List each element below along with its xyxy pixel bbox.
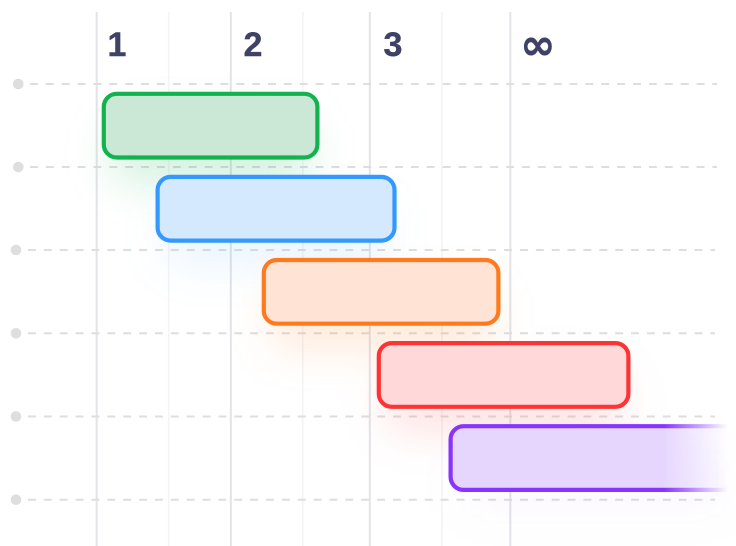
bar: red phase xyxy=(379,343,628,407)
column label: 2: 2 xyxy=(244,26,262,64)
column label: 1: 1 xyxy=(108,26,126,64)
bar: orange phase xyxy=(264,260,498,324)
bar: green phase xyxy=(104,94,317,158)
bar shadow: red xyxy=(387,371,620,431)
bar: purple phase fading out to the right xyxy=(451,426,736,490)
bar shadow: purple xyxy=(459,454,729,514)
bar shadow: green xyxy=(112,122,309,182)
column label: 3: 3 xyxy=(384,26,402,64)
phase bars xyxy=(102,92,726,492)
bar: blue phase xyxy=(158,177,394,241)
bar shadow: blue xyxy=(166,205,386,265)
bar shadow: orange xyxy=(272,288,490,348)
column label: infinity: ∞ xyxy=(520,20,555,68)
